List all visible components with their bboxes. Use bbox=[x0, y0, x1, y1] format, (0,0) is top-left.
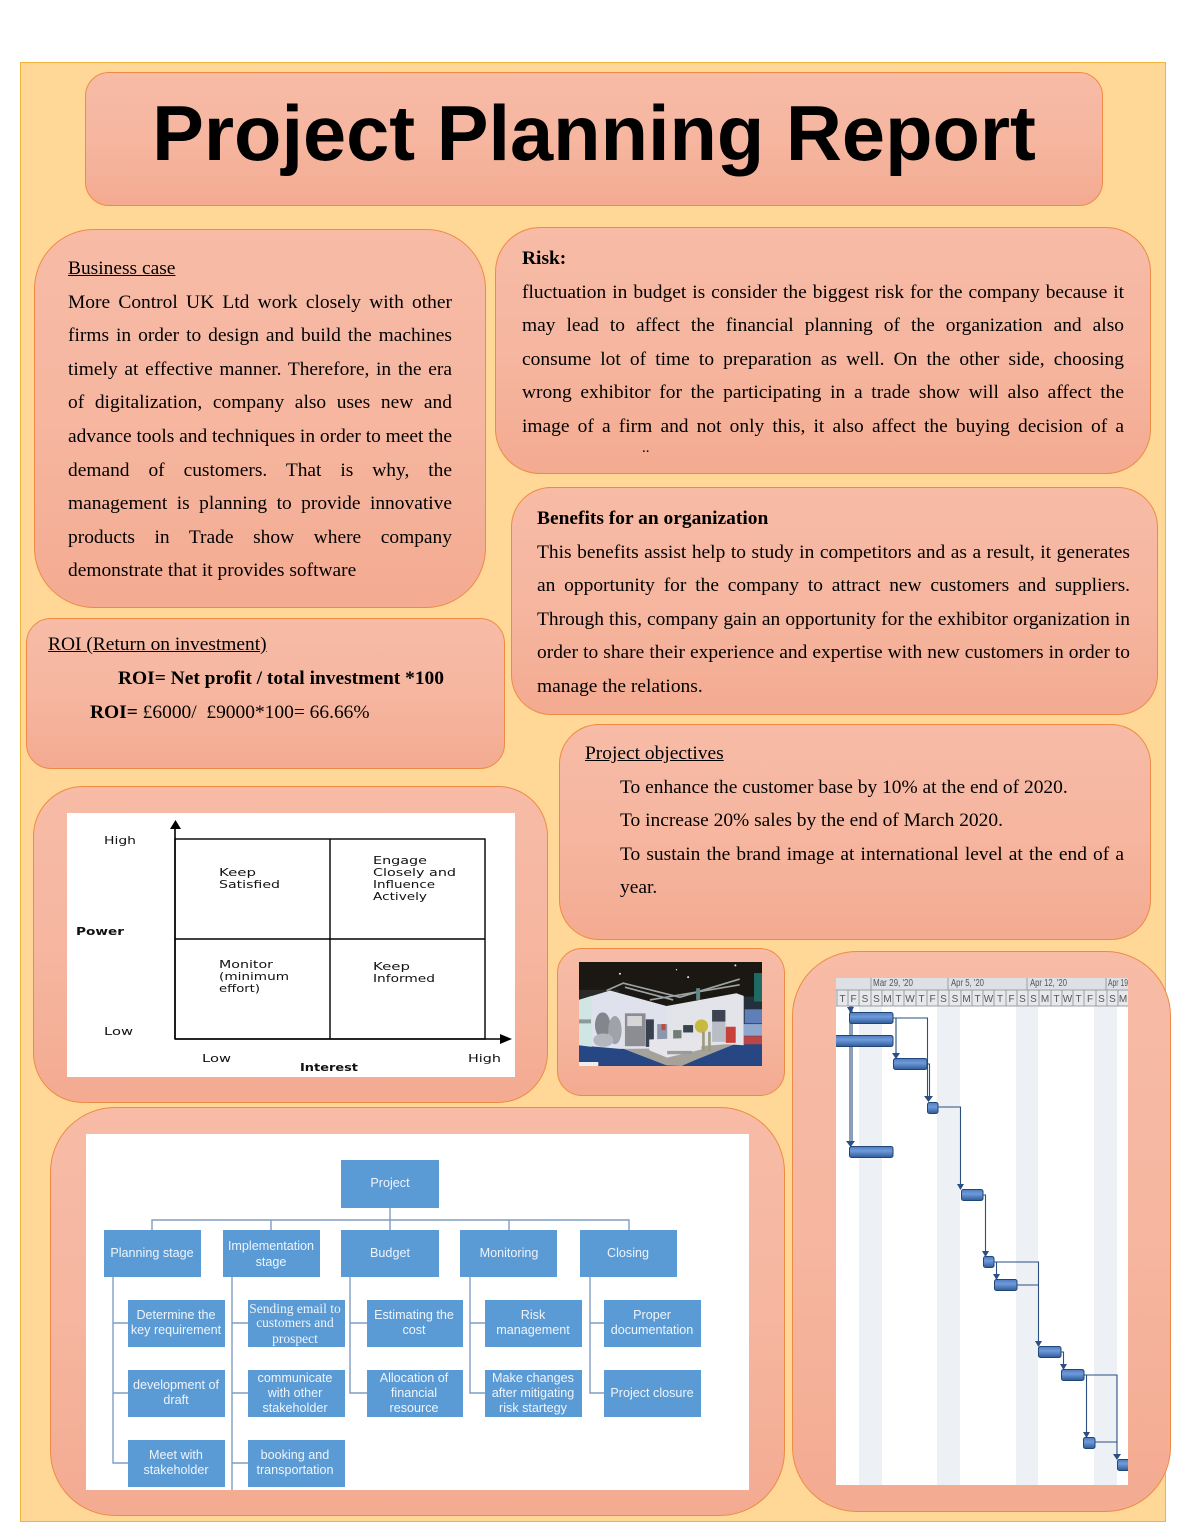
chart: power interest matrix: Low bbox=[202, 1052, 231, 1065]
chart: gantt timeline: T bbox=[1053, 994, 1060, 1005]
chart: gantt timeline: Apr 5, '20 bbox=[951, 978, 984, 989]
chart: work breakdown structure: prospect bbox=[272, 1331, 318, 1346]
panel: stakeholder matrix bbox=[33, 786, 548, 1103]
panel: business case bbox=[34, 229, 486, 608]
chart: gantt timeline: F bbox=[1087, 994, 1093, 1005]
title banner bbox=[85, 72, 1103, 206]
text: business case bbox=[68, 258, 452, 581]
chart: work breakdown structure: Implementation bbox=[228, 1239, 314, 1253]
chart: power interest matrix: Actively bbox=[373, 890, 428, 903]
chart: work breakdown structure: resource bbox=[390, 1401, 438, 1415]
panel: photo bbox=[557, 948, 785, 1096]
text: ROI bbox=[48, 634, 444, 723]
chart: work breakdown structure: risk startegy bbox=[499, 1401, 568, 1415]
chart: power interest matrix: Keep bbox=[219, 866, 256, 879]
chart: gantt timeline: S bbox=[1109, 994, 1116, 1005]
text: ROI: ROI= Net profit / total investment *100 bbox=[118, 668, 444, 689]
photo: trade show exhibition stand bbox=[579, 962, 762, 1066]
text: ROI: ROI (Return on investment) bbox=[48, 634, 267, 655]
chart: work breakdown structure: Proper bbox=[633, 1308, 671, 1322]
text: business case: Business case bbox=[68, 258, 175, 279]
chart: power interest matrix bbox=[67, 813, 515, 1077]
chart: work breakdown structure: Monitoring bbox=[480, 1246, 538, 1260]
text: benefits: This benefits assist help to study in competitors and as a result, it generates bbox=[537, 542, 1130, 563]
chart: power interest matrix: Closely and bbox=[373, 866, 456, 879]
text: business case: demand of customers. That is why, the bbox=[68, 460, 452, 481]
panel: ROI bbox=[26, 618, 505, 769]
chart: work breakdown structure: transportation bbox=[256, 1463, 334, 1477]
chart: gantt timeline: Mar 29, '20 bbox=[873, 978, 913, 989]
title: Project Planning Report bbox=[152, 90, 1036, 176]
chart: work breakdown structure: Estimating the bbox=[374, 1308, 454, 1322]
panel: work breakdown structure bbox=[50, 1107, 785, 1516]
chart: gantt timeline: W bbox=[984, 994, 994, 1005]
text: benefits: an opportunity for the company to attract new customers and suppliers. bbox=[537, 575, 1130, 596]
text: business case: More Control UK Ltd work closely with other bbox=[68, 292, 452, 313]
text: benefits: Through this, company gain an opportunity for the exhibitor organization in bbox=[537, 609, 1130, 630]
chart: power interest matrix: Power bbox=[76, 925, 125, 938]
text: benefits bbox=[537, 508, 1130, 697]
chart: gantt timeline: W bbox=[905, 994, 915, 1005]
chart: power interest matrix: Informed bbox=[373, 972, 435, 985]
clipped text marks: .. bbox=[642, 440, 650, 456]
chart: power interest matrix: Low bbox=[104, 1025, 133, 1038]
text: benefits: manage the relations. bbox=[537, 676, 703, 697]
panel: project objectives bbox=[559, 724, 1151, 940]
chart: gantt timeline: S bbox=[952, 994, 959, 1005]
chart: power interest matrix: Monitor bbox=[219, 958, 274, 971]
chart: gantt timeline: S bbox=[1019, 994, 1026, 1005]
text: business case: advance tools and techniques in order to meet the bbox=[68, 426, 452, 447]
chart: work breakdown structure: development of bbox=[133, 1378, 220, 1392]
chart: work breakdown structure: Project closure bbox=[610, 1386, 694, 1400]
text: project objectives bbox=[585, 743, 1124, 898]
chart: gantt timeline: S bbox=[862, 994, 869, 1005]
chart: work breakdown structure bbox=[86, 1134, 749, 1490]
text: business case: timely at effective manner. Therefore, in the era bbox=[68, 359, 452, 380]
chart: gantt timeline: M bbox=[1119, 994, 1127, 1005]
chart: work breakdown structure: Budget bbox=[370, 1246, 410, 1260]
chart: work breakdown structure: Closing bbox=[607, 1246, 649, 1260]
text: risk: wrong exhibitor for the participating in a trade show will also affect the bbox=[522, 382, 1124, 403]
chart: work breakdown structure: Project bbox=[370, 1176, 410, 1190]
chart: gantt timeline: M bbox=[883, 994, 892, 1005]
chart: gantt timeline: M bbox=[1041, 994, 1049, 1005]
chart: work breakdown structure: Make changes bbox=[492, 1371, 574, 1385]
panel: benefits bbox=[511, 487, 1158, 715]
text: risk: fluctuation in budget is consider the biggest risk for the company because it bbox=[522, 282, 1124, 303]
chart: gantt timeline bbox=[836, 978, 1128, 1485]
chart: gantt timeline: F bbox=[850, 994, 857, 1005]
chart: gantt timeline: F bbox=[1008, 994, 1015, 1005]
text: project objectives: To enhance the customer base by 10% at the end of 2020. bbox=[620, 777, 1068, 798]
chart: work breakdown structure: booking and bbox=[261, 1448, 329, 1462]
text: business case: products in Trade show where company bbox=[68, 527, 452, 548]
chart: work breakdown structure: Determine the bbox=[136, 1308, 216, 1322]
text: risk bbox=[522, 248, 1124, 437]
chart: work breakdown structure: communicate bbox=[258, 1371, 332, 1385]
chart: power interest matrix: Interest bbox=[300, 1061, 358, 1074]
chart: work breakdown structure: cost bbox=[402, 1323, 426, 1337]
chart: gantt timeline: T bbox=[997, 994, 1003, 1005]
chart: gantt timeline: T bbox=[895, 994, 902, 1005]
text: business case: of digitalization, company also uses new and bbox=[68, 392, 452, 413]
chart: work breakdown structure: Allocation of bbox=[380, 1371, 449, 1385]
chart: work breakdown structure: key requirement bbox=[131, 1323, 222, 1337]
chart: work breakdown structure: customers and bbox=[256, 1315, 334, 1330]
chart: work breakdown structure: Sending email to bbox=[249, 1301, 341, 1316]
chart: power interest matrix: effort) bbox=[219, 982, 260, 995]
text: risk: may lead to affect the financial planning of the organization and also bbox=[522, 315, 1124, 336]
chart: gantt timeline: S bbox=[940, 994, 947, 1005]
text: risk: consume lot of time to preparation as well. On the other side, choosing bbox=[522, 349, 1124, 370]
text: project objectives: year. bbox=[620, 877, 657, 898]
chart: power interest matrix: Keep bbox=[373, 960, 410, 973]
chart: gantt timeline: F bbox=[929, 994, 936, 1005]
chart: power interest matrix: Satisfied bbox=[219, 878, 280, 891]
chart: work breakdown structure: stakeholder bbox=[143, 1463, 209, 1477]
text: business case: firms in order to design and build the machines bbox=[68, 325, 452, 346]
text: project objectives: To increase 20% sales by the end of March 2020. bbox=[620, 810, 1003, 831]
panel: risk bbox=[495, 227, 1151, 474]
text: risk: Risk: bbox=[522, 248, 566, 269]
chart: work breakdown structure: stakeholder bbox=[262, 1401, 328, 1415]
chart: gantt timeline: M bbox=[962, 994, 971, 1005]
chart: gantt timeline: T bbox=[918, 994, 925, 1005]
chart: gantt timeline: W bbox=[1063, 994, 1073, 1005]
text: ROI: ROI= £6000/ £9000*100= 66.66% bbox=[90, 702, 370, 723]
chart: work breakdown structure: management bbox=[496, 1323, 570, 1337]
chart: work breakdown structure: Risk bbox=[521, 1308, 546, 1322]
chart: power interest matrix: Engage bbox=[373, 854, 427, 867]
text: benefits: order to share their experience and expertise with new customers in order to bbox=[537, 642, 1130, 663]
chart: gantt timeline: Apr 12, '20 bbox=[1030, 978, 1067, 989]
chart: work breakdown structure: draft bbox=[163, 1393, 189, 1407]
chart: work breakdown structure: stage bbox=[256, 1255, 286, 1269]
text: project objectives: Project objectives bbox=[585, 743, 724, 764]
chart: work breakdown structure: documentation bbox=[611, 1323, 693, 1337]
chart: gantt timeline: T bbox=[1075, 994, 1082, 1005]
chart: gantt timeline: T bbox=[839, 994, 846, 1005]
panel: gantt chart bbox=[792, 951, 1171, 1512]
chart: work breakdown structure: after mitigating bbox=[492, 1386, 574, 1400]
chart: power interest matrix: High bbox=[468, 1052, 501, 1065]
chart: work breakdown structure: Planning stage bbox=[110, 1246, 194, 1260]
chart: gantt timeline: S bbox=[873, 994, 880, 1005]
chart: gantt timeline: S bbox=[1098, 994, 1105, 1005]
chart: work breakdown structure: financial bbox=[391, 1386, 437, 1400]
chart: work breakdown structure: with other bbox=[267, 1386, 322, 1400]
text: business case: management is planning to provide innovative bbox=[68, 493, 452, 514]
chart: work breakdown structure: Meet with bbox=[149, 1448, 203, 1462]
chart: power interest matrix: (minimum bbox=[219, 970, 289, 983]
chart: power interest matrix: Influence bbox=[373, 878, 435, 891]
text: project objectives: To sustain the brand image at international level at the end of a bbox=[620, 844, 1124, 865]
chart: gantt timeline: S bbox=[1030, 994, 1037, 1005]
text: risk: image of a firm and not only this, it also affect the buying decision of a bbox=[522, 416, 1124, 437]
chart: power interest matrix: High bbox=[104, 834, 136, 847]
text: benefits: Benefits for an organization bbox=[537, 508, 768, 529]
chart: gantt timeline: T bbox=[974, 994, 981, 1005]
text: business case: demonstrate that it provides software bbox=[68, 560, 356, 581]
